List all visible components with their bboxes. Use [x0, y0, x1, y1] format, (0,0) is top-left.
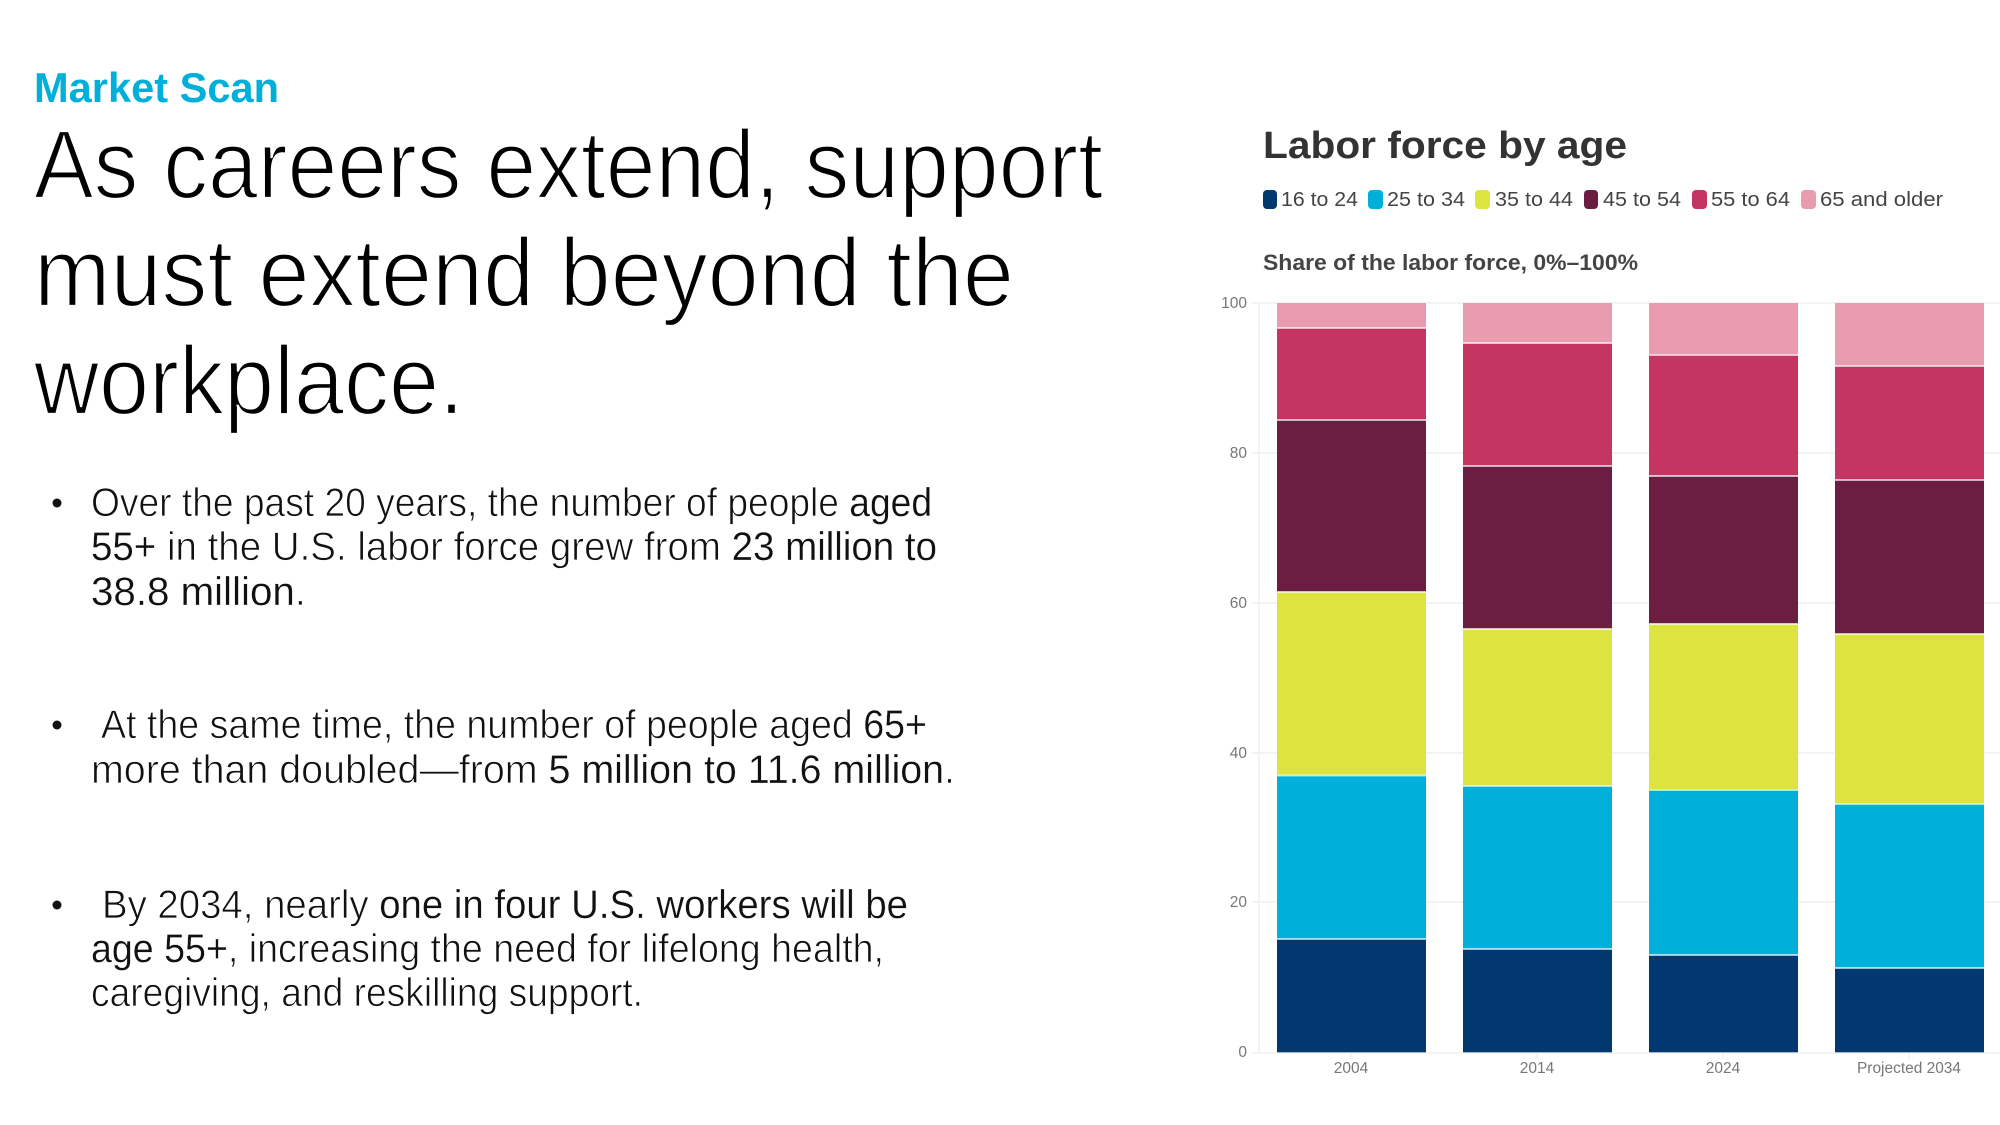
bar: 2014 — [1463, 303, 1612, 1052]
y axis labels: 40 — [1230, 745, 1247, 762]
bar: projected 2034 — [1835, 303, 1984, 1052]
bullet 1: aged 55+ growth: 55+ in the U.S. labor force grew from 23 million to — [91, 525, 937, 569]
chart legend: 35 to 44 — [1495, 189, 1573, 211]
y axis labels: 20 — [1230, 894, 1247, 911]
y axis labels — [1221, 295, 1247, 1061]
title: As careers extend, support — [34, 110, 1103, 219]
x axis labels: 2004 — [1334, 1060, 1369, 1077]
x axis labels: Projected 2034 — [1857, 1060, 1961, 1077]
title: workplace. — [33, 326, 464, 435]
chart legend — [1263, 189, 1943, 211]
title: must extend beyond the — [34, 218, 1014, 327]
bullet 1: aged 55+ growth: 38.8 million. — [91, 570, 306, 614]
chart legend: 45 to 54 — [1603, 189, 1681, 211]
y axis labels: 80 — [1230, 445, 1247, 462]
bar: 2004 — [1277, 303, 1426, 1052]
panel: key points — [52, 481, 955, 1015]
x axis labels: 2024 — [1706, 1060, 1741, 1077]
bullet 3: one in four by 2034: caregiving, and reskilling support. — [91, 971, 643, 1015]
eyebrow: Market Scan: Market Scan — [34, 64, 279, 111]
y axis labels: 100 — [1221, 295, 1247, 312]
bullet 2: aged 65+ doubled — [52, 703, 955, 792]
bar: 2024 — [1649, 303, 1798, 1052]
bullet 2: aged 65+ doubled: more than doubled—from 5 million to 11.6 million. — [91, 748, 955, 792]
y axis labels: 0 — [1238, 1044, 1247, 1061]
chart legend: 25 to 34 — [1387, 189, 1465, 211]
bullet 3: one in four by 2034: By 2034, nearly one in four U.S. workers will be — [102, 883, 908, 927]
bullet 1: aged 55+ growth: Over the past 20 years, the number of people aged — [91, 481, 932, 525]
chart subtitle: Share of the labor force, 0%–100% — [1263, 250, 1638, 275]
chart heading: Labor force by age — [1263, 125, 1627, 167]
chart legend: 55 to 64 — [1711, 189, 1790, 211]
bullet 3: one in four by 2034: age 55+, increasing the need for lifelong health, — [91, 927, 884, 971]
x axis labels — [1334, 1060, 1961, 1077]
bullet 1: aged 55+ growth — [52, 481, 937, 614]
chart legend: 16 to 24 — [1281, 189, 1358, 211]
bullet 2: aged 65+ doubled: At the same time, the number of people aged 65+ — [101, 703, 927, 747]
bullet 3: one in four by 2034 — [52, 883, 908, 1015]
chart legend: 65 and older — [1820, 189, 1943, 211]
x axis labels: 2014 — [1520, 1060, 1555, 1077]
chart: stacked bars — [1221, 295, 2000, 1077]
y axis labels: 60 — [1230, 595, 1247, 612]
title — [33, 110, 1103, 435]
